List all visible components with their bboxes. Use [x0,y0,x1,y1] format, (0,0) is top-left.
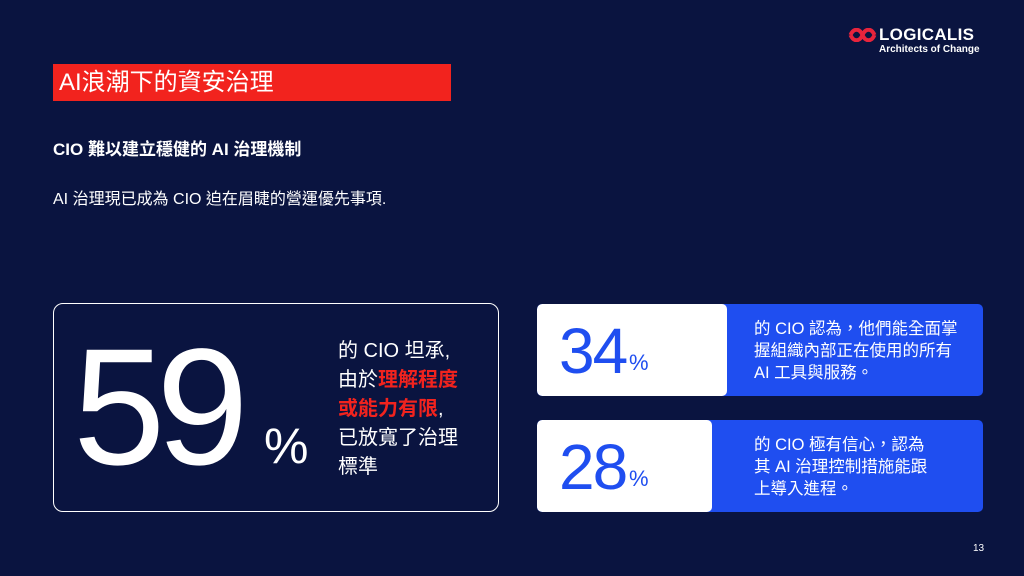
number box: 28 [559,431,626,503]
number box [537,420,712,512]
panel text: 或能力有限, [338,398,444,420]
title [53,64,451,101]
logo [848,25,980,55]
logo: Architects of Change [879,44,980,55]
card text [754,436,927,498]
card text: 的 CIO 極有信心，認為 [754,436,925,454]
big number: 59 [73,315,240,500]
subtitle: CIO 難以建立穩健的 AI 治理機制 [53,140,301,159]
number box: % [629,350,649,375]
logo: LOGICALIS [879,25,974,44]
number box: % [629,466,649,491]
card text [754,320,958,382]
panel text: 已放寬了治理 [338,427,458,449]
card text: 上導入進程。 [754,480,853,498]
card text: 握組織內部正在使用的所有 [754,342,952,360]
panel text [338,340,458,478]
page number: 13 [973,543,984,554]
panel text: 標準 [338,456,378,478]
card text: 的 CIO 認為，他們能全面掌 [754,320,958,338]
panel: 59% [53,303,499,512]
card: 28% [537,420,983,512]
card text: AI 工具與服務。 [754,364,873,382]
percent: % [264,418,308,474]
card: 34% [537,304,983,396]
panel text: 由於理解程度 [338,369,458,391]
number box: 34 [559,315,626,387]
intro text: AI 治理現已成為 CIO 迫在眉睫的營運優先事項. [53,191,386,208]
number box [537,304,727,396]
card text: 其 AI 治理控制措施能跟 [754,458,927,476]
title: AI浪潮下的資安治理 [59,69,274,96]
panel text: 的 CIO 坦承, [338,340,450,362]
